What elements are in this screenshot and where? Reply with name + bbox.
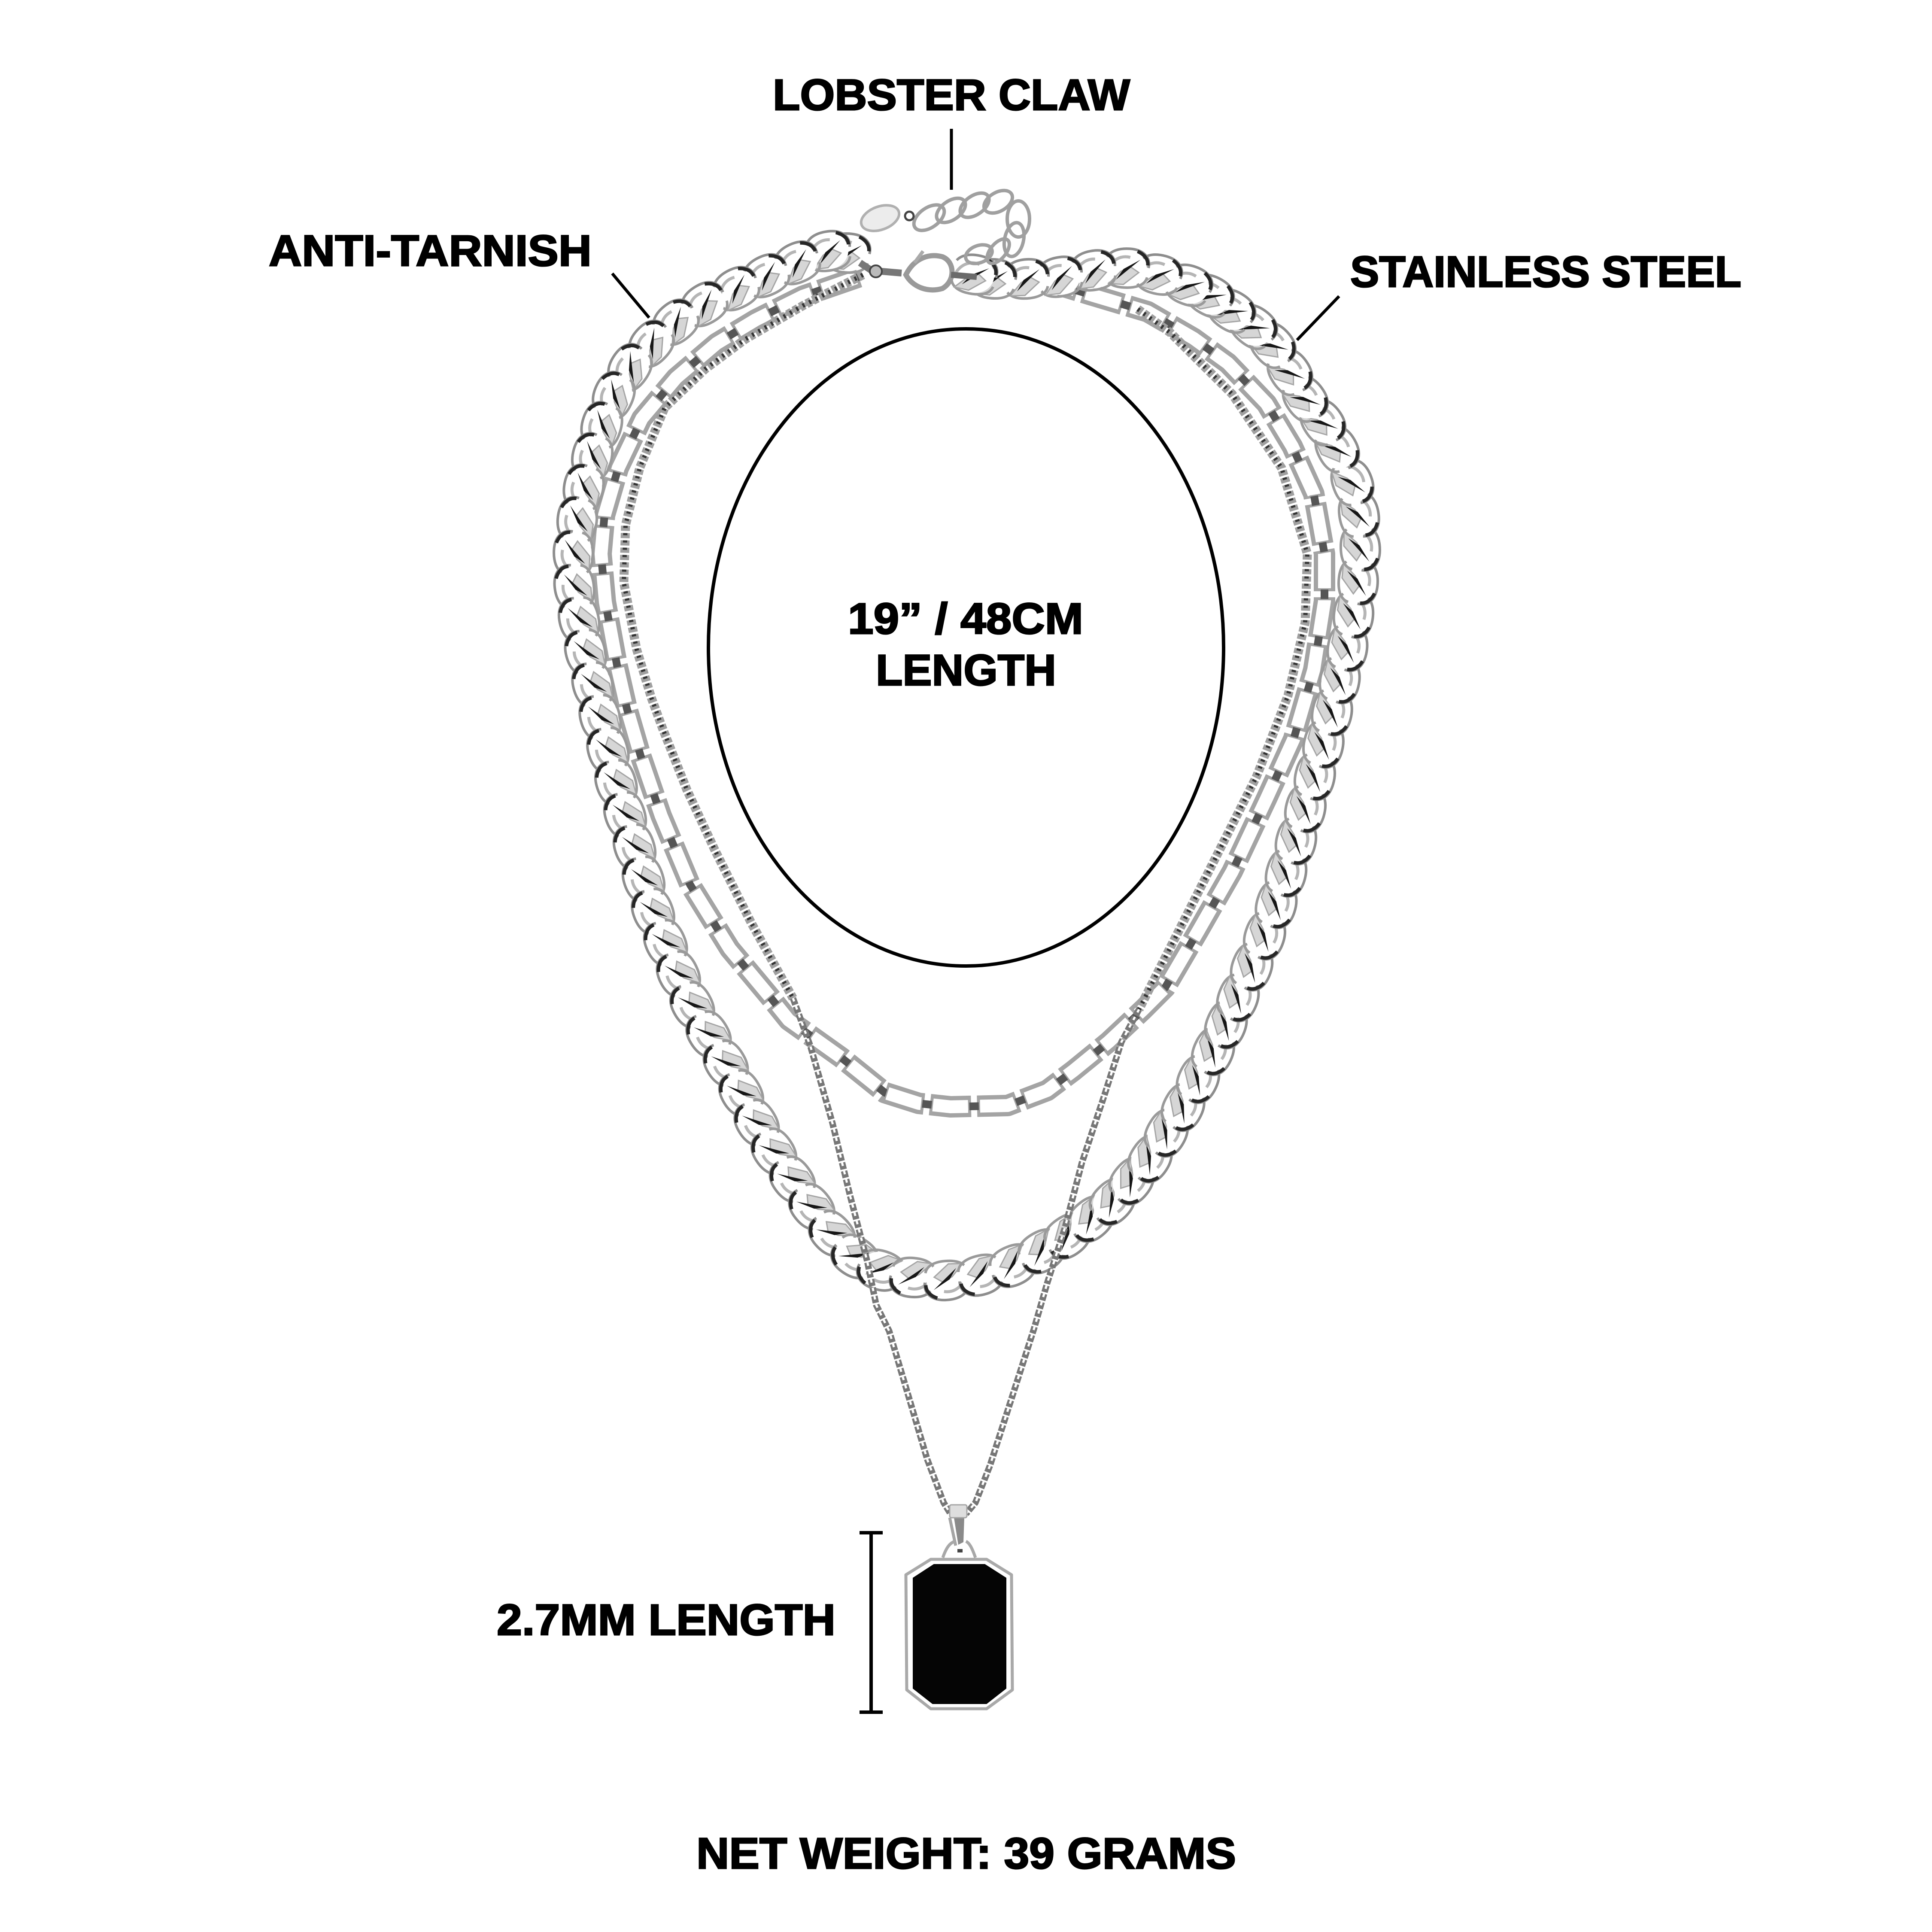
leader line: anti-tarnish [612,273,649,318]
label: pendant size: 2.7MM LENGTH [497,1595,835,1644]
leader line: stainless steel [1297,296,1339,340]
label: anti-tarnish: ANTI-TARNISH [269,226,592,275]
extender chain and logo tag [858,186,1030,267]
tag frame [906,1559,1012,1709]
label: necklace length: 19” / 48CM [848,594,1083,643]
oval: neck opening outline [708,329,1224,966]
label: necklace length [848,594,1083,695]
pendant bail [943,1505,975,1558]
lobster claw clasp [860,251,977,290]
label: stainless steel: STAINLESS STEEL [1350,247,1741,296]
black stone [913,1564,1006,1704]
logo tag [858,200,902,236]
chain: heavy curb strand [574,251,1360,1280]
pendant: dog tag [906,1505,1012,1709]
label: lobster claw: LOBSTER CLAW [773,70,1130,119]
dimension bracket: pendant height [860,1531,883,1714]
leader line: lobster claw [950,129,953,190]
necklace illustration [574,186,1360,1709]
chain: paperclip middle strand [601,277,1324,1107]
chain: fine box strand with pendant drop [624,275,1307,1514]
label: necklace length: LENGTH [876,646,1056,695]
label: net weight: NET WEIGHT: 39 GRAMS [696,1829,1236,1878]
